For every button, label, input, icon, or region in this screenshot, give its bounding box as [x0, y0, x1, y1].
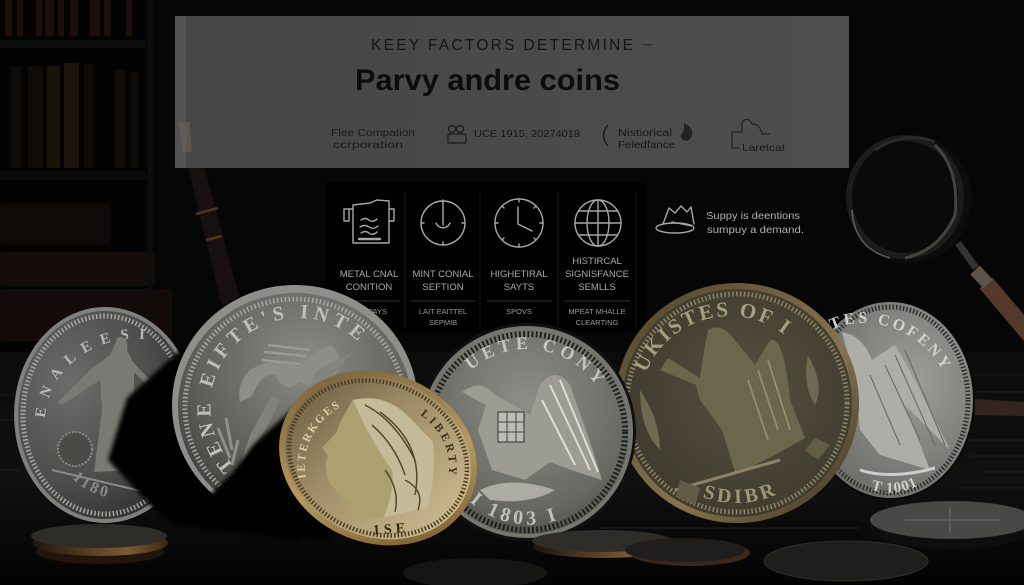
magnifying glass	[848, 135, 1024, 335]
flat dark coin lower centre	[403, 558, 547, 585]
coin legend: UKISTES OF I	[634, 302, 792, 370]
icon: crescent	[604, 125, 608, 146]
coin legend left: IETERKGES	[297, 401, 339, 479]
factor: historical relevance: Feledfance	[618, 139, 675, 151]
bookshelf	[0, 0, 172, 360]
factor: date: UCE 1915, 20274018	[474, 128, 580, 140]
icon: people	[448, 126, 466, 143]
sublabel col 4: CLEARTING	[576, 318, 619, 327]
coin legend: TENE EIFTE'S INTE	[197, 304, 365, 475]
label: historical significance: SEMLLS	[578, 282, 616, 293]
coin: gold liberty head	[279, 370, 477, 546]
label: historical significance: SIGNISFANCE	[565, 269, 629, 280]
icon: power dial	[421, 200, 465, 245]
label: mint section: SEFTION	[422, 282, 464, 293]
shadow on left coin	[108, 340, 300, 540]
sublabel col 4: MPEAT MHALLE	[568, 307, 626, 316]
shadow on large coin	[205, 395, 345, 540]
sublabel col 2: SEPMIB	[429, 318, 457, 327]
date: T 1001	[872, 478, 917, 493]
portrait	[322, 398, 434, 523]
kicker text: KEEY FACTORS DETERMINE	[371, 37, 633, 54]
supply and demand note	[706, 210, 804, 236]
small bronze coin centre	[532, 530, 675, 558]
icon: globe	[575, 200, 621, 246]
panel: factor columns	[325, 182, 645, 332]
coin legend: UETE CONY	[464, 337, 606, 383]
lady figure	[58, 337, 150, 472]
factor: market: Laretcat	[742, 142, 785, 154]
coin legend right: LIBERTY	[420, 409, 457, 475]
date: 1SE	[373, 521, 410, 538]
right wooden handle	[975, 399, 1024, 416]
table	[0, 352, 1024, 585]
coin: bronze griffin	[618, 283, 859, 523]
wooden pole	[178, 122, 239, 306]
sublabel col 1: SPAYS	[363, 307, 387, 316]
icon: clock	[495, 199, 543, 247]
bird figure	[218, 345, 352, 465]
factor: historical relevance: Nistiorical	[618, 127, 672, 139]
factor: composition: ccrporation	[333, 139, 403, 151]
label: metal condition: CONITION	[346, 282, 392, 293]
sublabel col 2: LAIT EAITTEL	[419, 307, 467, 316]
flat dark coin bottom	[764, 541, 928, 581]
icon: blob	[681, 123, 692, 141]
griffin figure	[640, 328, 830, 505]
label: mint section: MINT CONIAL	[412, 269, 474, 280]
denomination: SDIBR	[704, 484, 776, 503]
supply and demand note: sumpuy a demand.	[707, 224, 804, 236]
coin legend: E N A L E E S I	[35, 328, 145, 418]
supply and demand note: Suppy is deentions	[706, 210, 800, 222]
coin legend: TES COFENY	[828, 312, 952, 368]
factor: historical relevance	[618, 127, 675, 151]
date: 1180	[73, 472, 108, 496]
sublabel col 3: SPOVS	[506, 307, 532, 316]
title panel	[175, 16, 849, 168]
date: I 1803 I	[470, 492, 556, 525]
shield emblem	[58, 432, 92, 466]
small dark coin behind	[625, 538, 750, 566]
icon: market	[732, 119, 770, 148]
main heading: Parvy andre coins	[355, 64, 620, 97]
label: metal condition: METAL CNAL	[340, 269, 398, 280]
coin: centre silver eagle	[430, 323, 636, 541]
icon: document	[344, 200, 394, 243]
label: highetiral says: HIGHETIRAL	[490, 269, 548, 280]
eagle figure	[842, 332, 950, 470]
factor: composition	[331, 127, 415, 151]
coin: right silver eagle	[828, 302, 974, 498]
icon: hat	[656, 206, 694, 233]
coin: large silver bird	[172, 285, 416, 495]
flat silver coin right	[870, 501, 1024, 549]
small bronze coin left	[31, 524, 168, 564]
kicker dash	[643, 44, 652, 45]
label: historical significance: HISTIRCAL	[572, 256, 622, 267]
eagle figure	[462, 375, 602, 501]
label: highetiral says: SAYTS	[504, 282, 534, 293]
coin: left silver lady	[14, 307, 180, 523]
factor: composition: Flee Compation	[331, 127, 415, 139]
ground line	[52, 470, 145, 492]
